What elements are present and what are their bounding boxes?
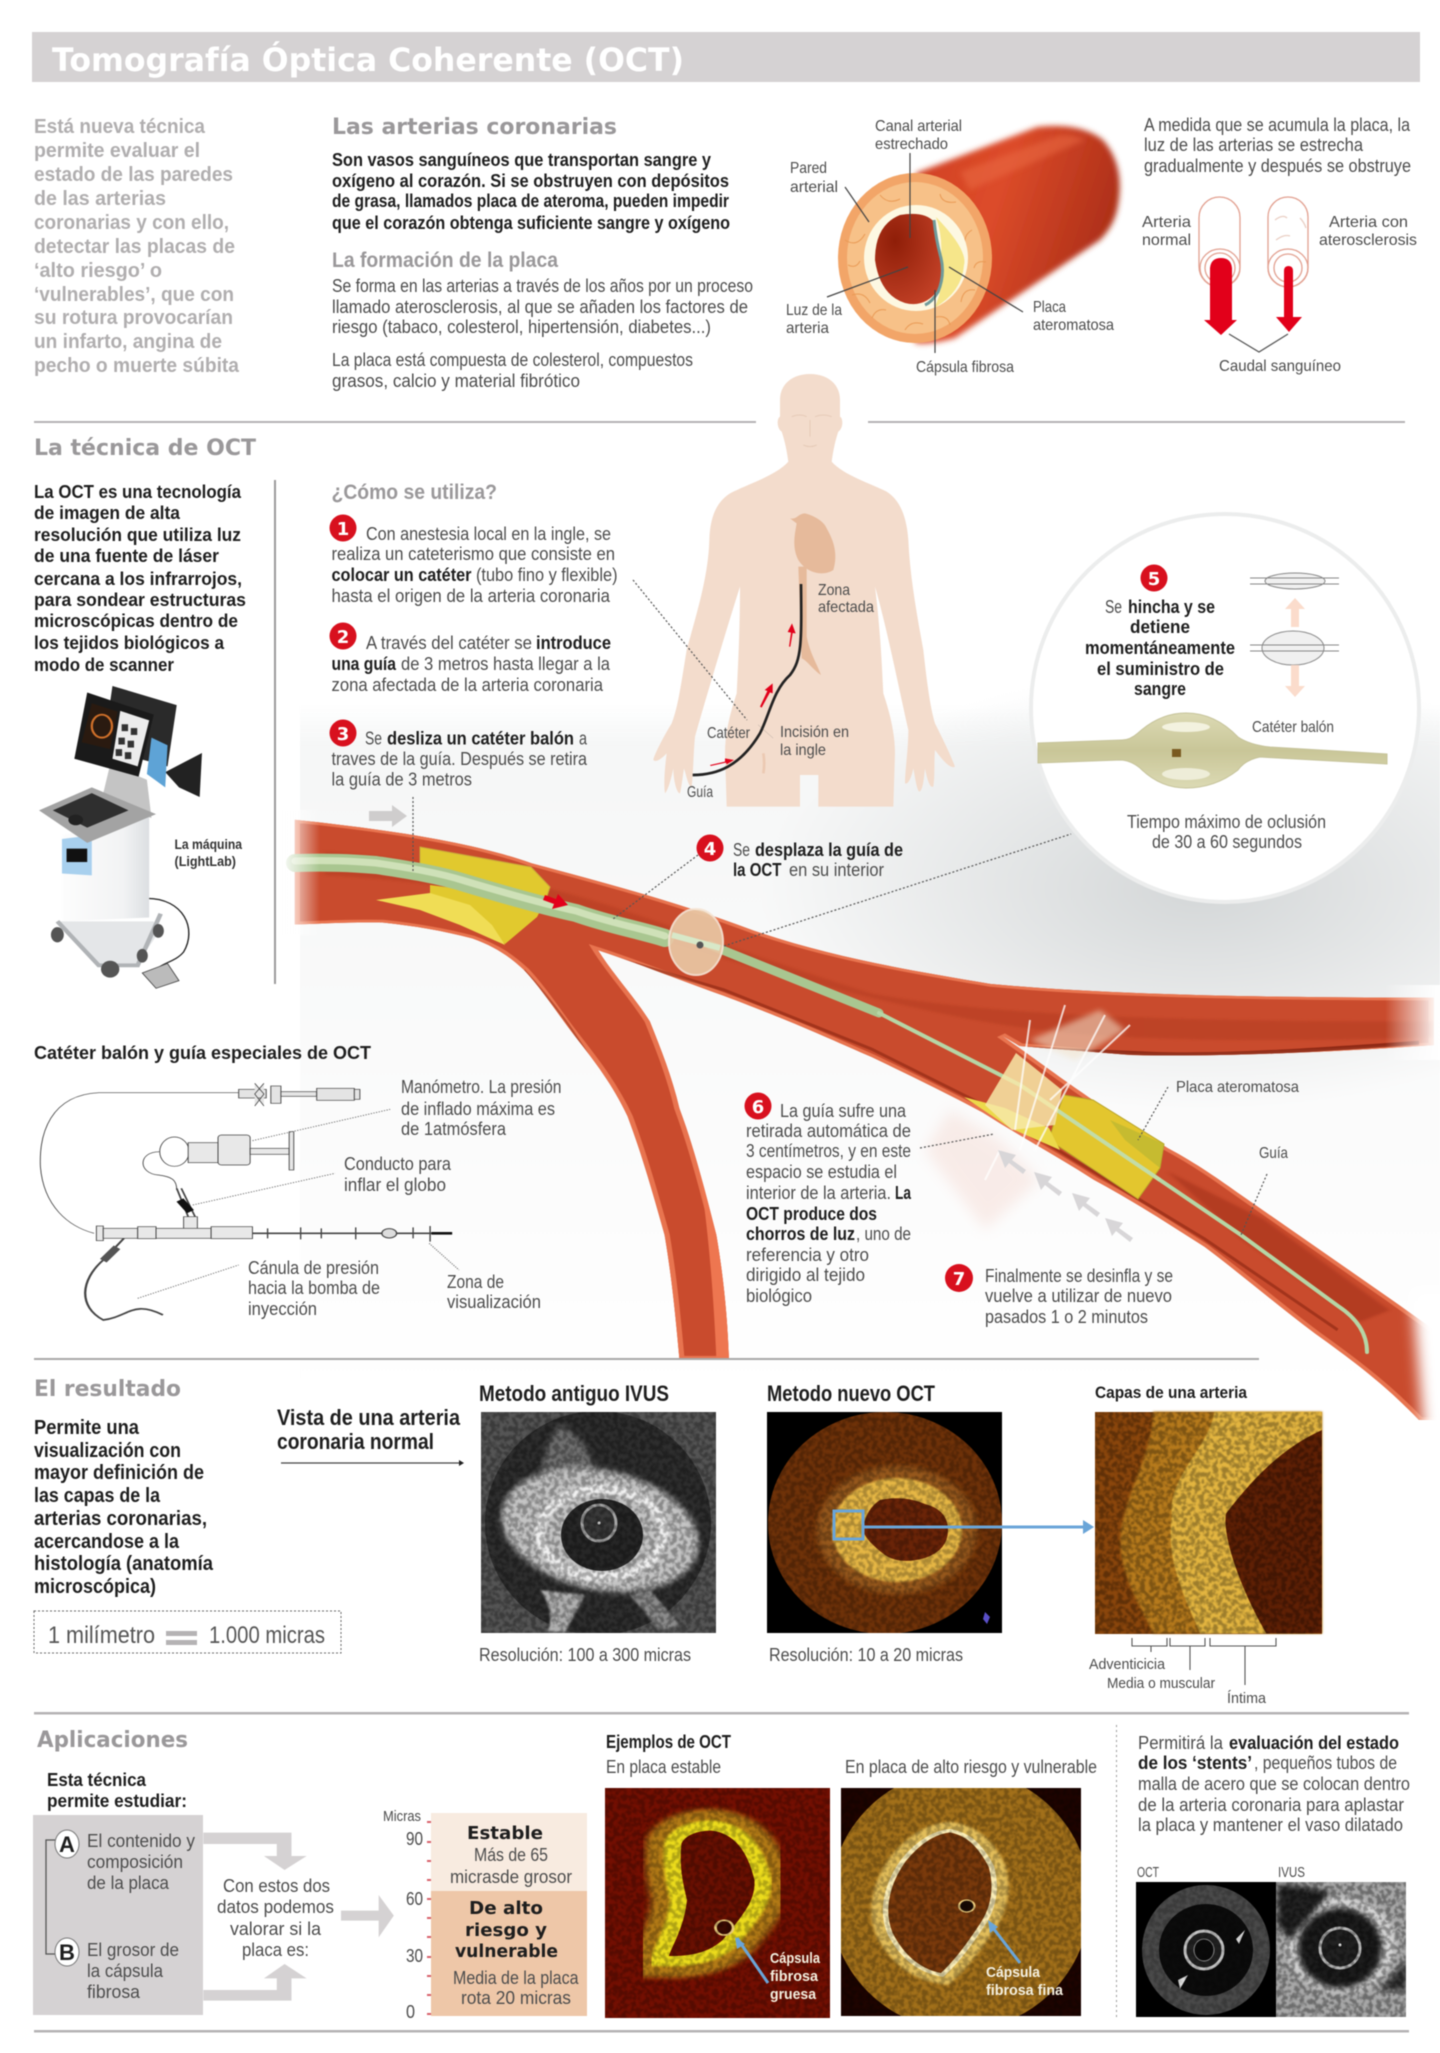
heading: la técnica: La técnica de OCT [34,436,256,461]
main coronary artery illustration [280,805,1440,1450]
bold paragraph [332,150,730,233]
step 3: desliza un catéter balón [387,728,574,748]
label: esta técnica [47,1770,187,1811]
diagram: normal artery vs atherosclerosis: Arteria con [1329,214,1408,231]
high risk band: De alto [469,1898,543,1919]
catheter labels: Zona de [447,1272,504,1292]
step 6: espacio se estudia el [746,1162,897,1182]
diagram: normal artery vs atherosclerosis: aterosclerosis [1319,232,1417,249]
paragraph: OCT definition: cercana a los infrarrojos, [34,569,242,589]
label: esta técnica: Esta técnica [47,1770,147,1790]
paragraph: result: visualización con [34,1440,181,1462]
step 5 text: sangre [1134,679,1186,699]
background wash [300,670,1440,1385]
arrows to assessment text [203,1833,394,2001]
bold paragraph: Son vasos sanguíneos que transportan sangre y [332,150,711,170]
diagram: balloon catheter device [40,1083,459,1320]
artery cross-section labels: arterial [790,179,838,196]
step 7 [945,1264,1173,1327]
label: vista normal with arrow [277,1405,464,1466]
scale axis: 30 [406,1946,423,1966]
intro text: su rotura provocarían [34,307,233,329]
paragraph: OCT definition: los tejidos biológicos a [34,633,225,653]
body labels [687,582,874,801]
zoom box and arrow [834,1511,1094,1539]
assessment text: datos podemos [217,1897,334,1917]
option A [55,1830,195,1893]
step 4: desplaza la guía de [755,840,903,860]
plaque: lower section [964,1085,1164,1199]
step 6: interior de la arteria. [746,1183,891,1203]
intro text: de las arterias [34,188,166,210]
intro text: pecho o muerte súbita [34,355,240,377]
label: la máquina [174,836,242,869]
paragraph: OCT definition: de imagen de alta [34,503,181,523]
step 4 [696,834,903,880]
artery labels: Placa ateromatosa [1176,1079,1299,1096]
step 7: 7 [953,1269,965,1290]
artery cross-section labels [786,118,1114,376]
high risk band [431,1891,587,2016]
catheter labels: de 1atmósfera [401,1119,507,1139]
step 1: (tubo fino y flexible) [476,565,618,585]
body labels: Incisión en [780,724,849,741]
artery cross-section labels: Cápsula fibrosa [916,359,1014,376]
label: thick cap: Cápsula [770,1950,821,1967]
guide wire [693,584,801,775]
circle callout: step 5: Catéter balón [1252,719,1334,736]
paragraph: result: acercandose a la [34,1531,180,1553]
step 1: 1 [337,519,349,540]
step 5 text: momentáneamente [1085,638,1235,658]
paragraph: OCT definition: modo de scanner [34,655,174,675]
step 2: 2 [337,627,349,648]
chart: cap thickness scale [383,1809,587,2022]
intro text: detectar las placas de [34,236,235,258]
step 2: A través del catéter se [366,633,532,653]
catheter labels: Manómetro. La presión [401,1077,562,1097]
icon: heart and aorta [790,513,835,675]
image: artery layers [1095,1412,1322,1634]
stent scan images: OCT [1137,1865,1159,1881]
step 3: la guía de 3 metros [332,770,472,790]
paragraph: result: mayor definición de [34,1462,204,1484]
option A: El contenido y [87,1831,195,1851]
scale axis: Micras [383,1809,421,1825]
paragraph: result: histología (anatomía [34,1553,214,1575]
paragraph: result [34,1417,214,1598]
bold paragraph: oxígeno al corazón. Si se obstruyen con depósitos [332,171,729,191]
OCT light beams [925,1005,1130,1230]
text: stents: , pequeños tubos de [1254,1753,1397,1773]
intro text: ‘alto riesgo’ o [34,260,162,282]
image: IVUS stent [1276,1882,1406,2017]
image: OCT stent [1136,1882,1276,2017]
option B [55,1938,179,2002]
option B: fibrosa [87,1982,141,2002]
label: vista normal with arrow: coronaria normal [277,1429,434,1454]
step 1: hasta el origen de la arteria coronaria [332,586,611,606]
paragraph: result: Permite una [34,1417,140,1439]
assessment text [217,1876,334,1960]
catheter labels: inflar el globo [344,1175,446,1195]
mini balloon diagrams [1250,573,1339,697]
diagram: normal artery vs atherosclerosis [1142,197,1417,375]
grey arrow [369,805,407,827]
intro text: un infarto, angina de [34,331,222,353]
artery cross-section labels: Placa [1033,299,1066,316]
diagram: normal artery vs atherosclerosis: normal [1142,232,1191,249]
body labels: la ingle [780,742,826,759]
artery tubes [1199,197,1308,287]
panel: OCT [767,1381,1094,1665]
high risk band: vulnerable [455,1941,558,1962]
layer labels: Media o muscular [1107,1676,1215,1692]
body labels: afectada [818,599,874,616]
text: stents: malla de acero que se colocan dentro [1138,1774,1410,1794]
red arrows [710,623,796,766]
stent scan images: IVUS [1278,1865,1305,1881]
step 6: retirada automática de [746,1121,911,1141]
heading examples: Ejemplos de OCT [606,1732,731,1752]
artery cross-section labels: Luz de la [786,302,842,319]
illustration: LightLab machine [39,686,202,988]
heading: cómo se utiliza: ¿Cómo se utiliza? [332,481,497,504]
title bar: Tomografía Óptica Coherente (OCT) [52,40,684,79]
example 1 caption: En placa estable [606,1757,721,1777]
heading: Las arterias coronarias [332,115,617,140]
catheter labels: de inflado máxima es [401,1099,555,1119]
catheter labels: inyección [248,1299,317,1319]
catheter labels: Cánula de presión [248,1258,379,1278]
heading OCT: Metodo nuevo OCT [767,1381,935,1406]
plaque: upper [376,847,550,945]
panel: study factors [33,1815,203,2015]
step 6: OCT produce dos [746,1204,877,1224]
label: la máquina: La máquina [174,836,242,852]
label: vista normal with arrow: Vista de una arteria [277,1405,461,1430]
body paragraphs: riesgo (tabaco, colesterol, hipertensión, diabetes...) [332,317,711,337]
step 6 [744,1092,912,1306]
unit equivalence box: 1.000 micras [209,1622,325,1649]
text: stents: evaluación del estado [1229,1733,1399,1753]
step 6: , uno de [856,1224,911,1244]
grey return arrows [998,1150,1133,1242]
occlusion time: de 30 a 60 segundos [1152,832,1302,852]
label: la máquina: (LightLab) [174,853,236,869]
catheter labels [248,1077,562,1319]
circle callout: step 5 [1031,514,1419,902]
scale axis [383,1809,434,2022]
assessment text: Con estos dos [223,1876,330,1896]
step 5 text: detiene [1130,617,1190,637]
diagram: normal artery vs atherosclerosis: Caudal sanguíneo [1219,358,1341,375]
high risk band: Media de la placa [453,1968,579,1988]
step 4: en su interior [789,860,884,880]
label: thick cap: gruesa [770,1986,817,2003]
label: thick cap [770,1950,821,2003]
body paragraphs: Se forma en las arterias a través de los años por un proceso [332,276,753,296]
occlusion time: Tiempo máximo de oclusión [1127,812,1326,832]
body paragraphs: grasos, calcio y material fibrótico [332,371,580,391]
paragraph: result: las capas de la [34,1485,161,1507]
intro text: permite evaluar el [34,140,200,162]
illustration: artery cross-section [827,126,1120,353]
high risk band: rota 20 micras [461,1988,571,2008]
subheading: La formación de la placa [332,249,558,272]
paragraph: OCT definition: resolución que utiliza luz [34,525,241,545]
label: thick cap: fibrosa [770,1968,819,1985]
body paragraphs: La placa está compuesta de colesterol, compuestos [332,350,693,370]
heading IVUS: Metodo antiguo IVUS [479,1381,669,1406]
step 6: chorros de luz [746,1224,855,1244]
label: thin cap: Cápsula [986,1964,1041,1981]
heading: aplicaciones: Aplicaciones [37,1728,188,1753]
callout lines [413,580,1267,1235]
paragraph: result: arterias coronarias, [34,1508,207,1530]
artery cross-section labels: Canal arterial [875,118,962,135]
occlusion time [1127,812,1326,852]
step 1: Con anestesia local en la ingle, se [366,524,611,544]
paragraph: OCT definition: para sondear estructuras [34,590,246,610]
step 2 [330,622,611,695]
title bar [32,32,1420,82]
stable band: Más de 65 [474,1845,548,1865]
assessment text: valorar si la [230,1919,322,1939]
red movement arrow [543,894,568,909]
step 6: 6 [752,1097,764,1118]
artery cross-section labels: estrechado [875,136,948,153]
step 1: realiza un cateterismo que consiste en [332,544,615,564]
step 6: referencia y otro [746,1245,869,1265]
unit equivalence box [34,1611,341,1653]
option A: composición [87,1852,183,1872]
intro text: ‘vulnerables’, que con [34,284,234,306]
paragraph: OCT definition: La OCT es una tecnología [34,482,242,502]
text: stents [1138,1733,1410,1835]
step 3 [330,720,588,790]
scale axis: 0 [406,2002,415,2022]
text: stents: Permitirá la [1138,1733,1224,1753]
label: esta técnica: permite estudiar: [47,1791,187,1811]
intro text: estado de las paredes [34,164,233,186]
body labels: Guía [687,784,713,801]
image: stable plaque [605,1788,830,2018]
artery cross-section labels: ateromatosa [1033,317,1114,334]
layer labels: Adventicicia [1089,1657,1166,1673]
unit equivalence box: 1 milímetro [48,1622,155,1649]
option A: de la placa [87,1873,170,1893]
step 7: Finalmente se desinfla y se [985,1266,1173,1286]
assessment text: placa es: [242,1940,309,1960]
option A: A [59,1832,75,1857]
step 2: introduce [536,633,611,653]
image: IVUS scan [481,1411,716,1635]
resolution OCT: Resolución: 10 a 20 micras [769,1645,963,1665]
paragraph: result: microscópica) [34,1576,156,1598]
catheter labels: visualización [447,1292,541,1312]
option B: la cápsula [87,1961,164,1981]
label: thin cap: fibrosa fina [986,1982,1064,1999]
intro text: Está nueva técnica [34,116,206,138]
intro text: coronarias y con ello, [34,212,229,234]
step 3: 3 [337,724,349,745]
layer labels [1089,1657,1267,1707]
step 5 text: Se [1105,597,1122,617]
step 6: biológico [746,1286,812,1306]
step 4: 4 [704,839,716,860]
badge 5: 5 [1148,569,1160,590]
bold paragraph: de grasa, llamados placa de ateroma, pueden impedir [332,191,729,211]
paragraph: OCT definition [34,482,246,675]
text: plaque narrows the artery: A medida que se acumula la placa, la [1144,115,1411,135]
catheter tube and guide [295,861,1367,1352]
paragraph: OCT definition: microscópicas dentro de [34,611,238,631]
step 1: colocar un catéter [332,565,472,585]
step 5 text [1085,597,1235,699]
example 2 caption: En placa de alto riesgo y vulnerable [845,1757,1097,1777]
catheter labels: hacia la bomba de [248,1278,380,1298]
panel: OCT examples [605,1732,1097,2030]
body labels: Catéter [707,725,751,742]
option B: B [59,1940,75,1965]
diagram: normal artery vs atherosclerosis: Arteria [1142,214,1191,231]
heading: el resultado: El resultado [34,1377,181,1402]
balloon catheter photo [1038,713,1387,788]
panel: capas de una arteria [1089,1383,1322,1707]
paragraph: OCT definition: de una fuente de láser [34,546,219,566]
option B: El grosor de [87,1940,179,1960]
step 4: Se [733,840,750,860]
text: stents: de los ‘stents’ [1138,1753,1252,1773]
step 6: 3 centímetros, y en este [746,1141,911,1161]
resolution IVUS: Resolución: 100 a 300 micras [479,1645,691,1665]
stable band: micrasde grosor [450,1867,572,1887]
step 3: Se [365,728,382,748]
text: plaque narrows the artery [1144,115,1411,176]
stent scan images [1136,1865,1406,2017]
panel: IVUS [479,1381,716,1665]
step 2: zona afectada de la arteria coronaria [332,675,604,695]
body labels: Zona [818,582,850,599]
artery silhouette [295,820,1440,1420]
blood flow arrows [1204,258,1302,335]
step 6: dirigido al tejido [746,1265,865,1285]
text: plaque narrows the artery: luz de las arterias se estrecha [1144,135,1364,155]
text: plaque narrows the artery: gradualmente y después se obstruye [1144,156,1411,176]
artery labels [1176,1079,1299,1162]
balloon [669,909,723,975]
scale axis: 60 [406,1889,423,1909]
step 1 [330,514,618,606]
human body illustration [653,374,955,807]
artery cross-section labels: arteria [786,320,829,337]
scale axis: 90 [406,1829,423,1849]
artery cross-section labels: Pared [790,160,827,177]
step 2: una guía [332,654,397,674]
step 2: de 3 metros hasta llegar a la [401,654,611,674]
text: stents: la placa y mantener el vaso dilatado [1138,1815,1403,1835]
heading: catéter balón: Catéter balón y guía especiales de OCT [34,1043,371,1063]
text: stents: de la arteria coronaria para aplastar [1138,1795,1404,1815]
intro text [34,116,240,377]
badge 5 [1140,564,1168,592]
step 6: La [895,1183,912,1203]
step 5 text: hincha y se [1128,597,1215,617]
stable band: Estable [467,1823,543,1844]
section: las arterias coronarias [332,115,753,391]
artery labels: Guía [1259,1145,1288,1162]
fades [280,810,320,935]
step 3: traves de la guía. Después se retira [332,749,588,769]
body paragraphs [332,276,753,391]
high risk band: riesgo y [465,1920,547,1941]
image: OCT scan [767,1412,1002,1634]
step 5 text: el suministro de [1097,659,1224,679]
bold paragraph: que el corazón obtenga suficiente sangre y oxígeno [332,213,730,233]
layer brackets [1132,1638,1276,1685]
step 6: La guía sufre una [780,1101,907,1121]
catheter labels: Conducto para [344,1154,452,1174]
layer labels: Íntima [1227,1690,1267,1707]
label: thin cap [986,1965,1064,1996]
stable band [431,1813,587,1891]
step 3: a [579,728,588,748]
image: vulnerable plaque [840,1787,1082,2017]
step 7: vuelve a utilizar de nuevo [985,1286,1172,1306]
heading capas: Capas de una arteria [1095,1383,1247,1402]
body paragraphs: llamado aterosclerosis, al que se añaden los factores de [332,297,748,317]
step 7: pasados 1 o 2 minutos [985,1307,1148,1327]
step 4: la OCT [733,860,782,880]
